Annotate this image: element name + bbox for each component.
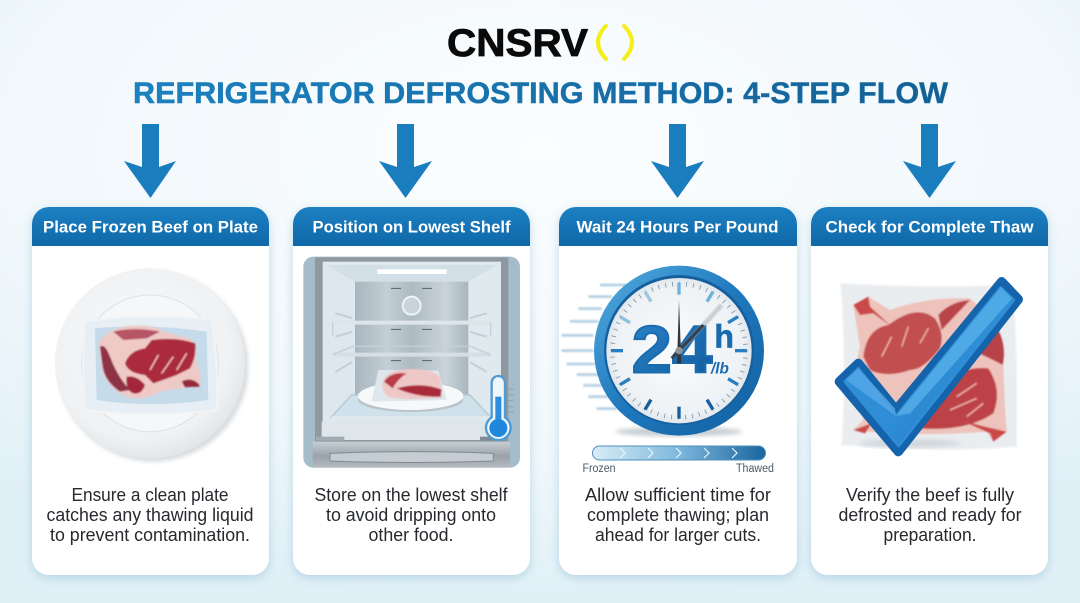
- title: REFRIGERATOR DEFROSTING METHOD: 4-STEP FLOW: [133, 77, 949, 110]
- header: step 2: [293, 207, 530, 246]
- icon: 24h per lb clock: /lb: [710, 360, 729, 377]
- clock hour marks: [611, 283, 747, 419]
- header: step 4: Check for Complete Thaw: [826, 218, 1034, 236]
- header: step 1: [32, 207, 269, 246]
- text: step 4 description: [838, 485, 1022, 545]
- progress bar: frozen to thawed: Thawed: [736, 463, 774, 475]
- arrow: step 4: [903, 124, 956, 198]
- header: step 3: Wait 24 Hours Per Pound: [576, 218, 778, 236]
- icon: open refrigerator with beef on lowest shelf: [303, 257, 520, 468]
- text: step 3 description: complete thawing; plan: [587, 505, 769, 525]
- text: step 2 description: to avoid dripping onto: [326, 505, 496, 525]
- text: step 4 description: preparation.: [884, 525, 976, 545]
- text: step 1 description: catches any thawing liquid: [46, 505, 254, 525]
- panel: step 3 wait time: [559, 207, 797, 575]
- arrow: step 3: [651, 124, 704, 198]
- text: step 1 description: Ensure a clean plate: [72, 485, 228, 505]
- panel: step 1 place on plate: [32, 207, 269, 575]
- text: step 3 description: Allow sufficient time for: [585, 485, 771, 505]
- text: step 3 description: [585, 485, 771, 545]
- icon: thawed beef with blue check mark: [839, 282, 1018, 452]
- arrow: step 1: [124, 124, 176, 198]
- text: step 1 description: [46, 485, 254, 545]
- progress bar: frozen to thawed: [582, 446, 774, 475]
- panel: step 2 lowest shelf: [293, 207, 530, 575]
- text: step 3 description: ahead for larger cuts.: [595, 525, 761, 545]
- icon: beef on a plate: [55, 268, 248, 462]
- logo: CNSRV: CNSRV: [447, 22, 588, 65]
- icon: 24h per lb clock: 24: [632, 314, 712, 388]
- text: step 4 description: Verify the beef is fully: [846, 485, 1014, 505]
- text: step 2 description: [314, 485, 508, 545]
- header: step 2: Position on Lowest Shelf: [312, 218, 511, 236]
- panel: step 4 check thaw: [811, 207, 1048, 575]
- header: step 3: [559, 207, 797, 246]
- text: step 2 description: other food.: [368, 525, 454, 545]
- text: step 2 description: Store on the lowest shelf: [314, 485, 508, 505]
- progress bar: frozen to thawed: Frozen: [582, 463, 616, 475]
- icon: 24h per lb clock: [562, 266, 764, 436]
- header: step 1: Place Frozen Beef on Plate: [43, 218, 258, 236]
- text: step 4 description: defrosted and ready for: [838, 505, 1022, 525]
- header: step 4: [811, 207, 1048, 246]
- icon: 24h per lb clock: h: [714, 318, 734, 354]
- icon: thermometer: [486, 376, 514, 440]
- text: step 1 description: to prevent contamination.: [50, 525, 250, 545]
- arrow: step 2: [379, 124, 432, 198]
